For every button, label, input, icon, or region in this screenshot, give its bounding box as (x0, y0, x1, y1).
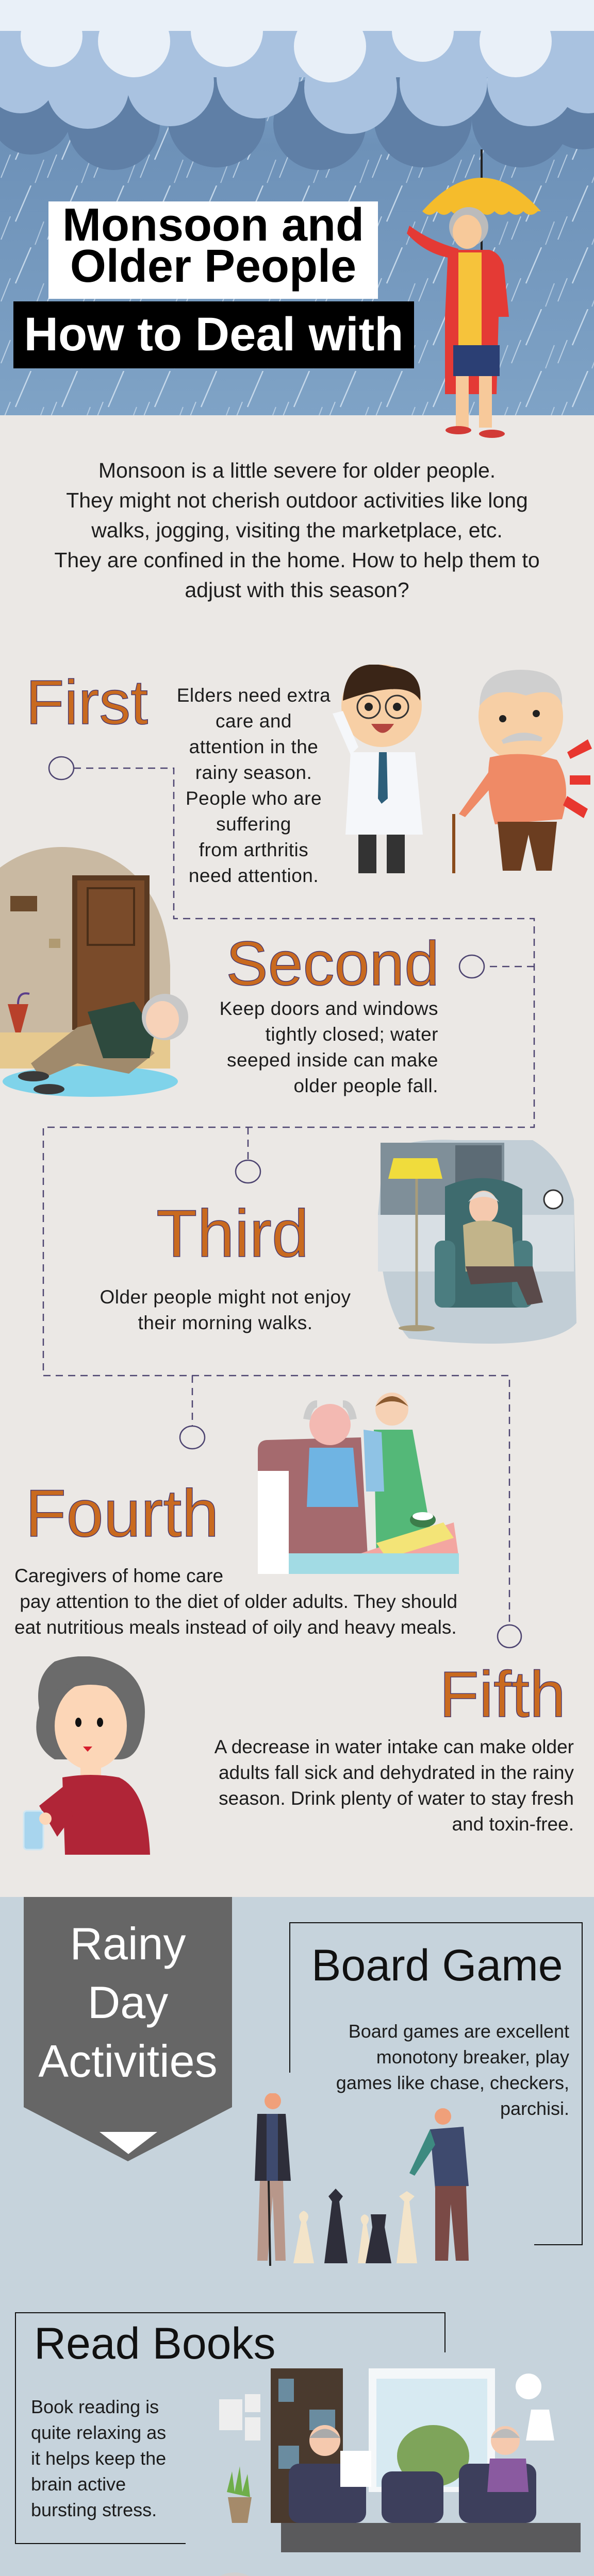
title box: Monsoon and Older People: Older People (70, 241, 356, 292)
text: second: tightly closed; water (266, 1024, 438, 1045)
illustration: woman in armchair by window (378, 1140, 576, 1344)
text: read books: brain active (31, 2473, 126, 2495)
panel: Board Game (289, 1922, 583, 2245)
heading: Fourth: Fourth (25, 1476, 219, 1551)
text: read books: bursting stress. (31, 2499, 157, 2520)
title banner: How to Deal with: How to Deal with (24, 308, 403, 361)
text: board game: parchisi. (500, 2098, 569, 2119)
illustration: woman with umbrella (407, 149, 541, 438)
panel: Read Books (15, 2312, 446, 2544)
text: read books (31, 2396, 166, 2520)
title box: Monsoon and Older People: Monsoon and (62, 199, 364, 251)
text: board game: games like chase, checkers, (336, 2072, 569, 2093)
text: first: suffering (216, 814, 291, 835)
text: third (100, 1286, 351, 1333)
illustration: woman with glass of water (23, 1656, 150, 1855)
text: first: Elders need extra (177, 685, 331, 706)
rainy day activities section background (0, 1897, 594, 2576)
text: second: Keep doors and windows (220, 998, 438, 1019)
text: first: from arthritis (199, 839, 308, 860)
text: first: care and (216, 710, 292, 732)
heading: Fifth: Fifth (439, 1658, 566, 1731)
text: read books: Book reading is (31, 2396, 159, 2417)
text: third: their morning walks. (138, 1312, 312, 1333)
illustration: doctor and elderly man (333, 665, 592, 873)
text: first: rainy season. (195, 762, 312, 783)
clouds (0, 67, 594, 170)
text: fifth: season. Drink plenty of water to stay fresh (219, 1788, 574, 1809)
text: first (177, 685, 331, 886)
text: fourth: pay attention to the diet of older adults. They should (20, 1591, 457, 1612)
illustration: living room reading (219, 2368, 581, 2552)
title box: Monsoon and Older People (48, 201, 378, 299)
heading: Board Game: Board Game (311, 1941, 563, 1990)
text: second: seeped inside can make (227, 1049, 438, 1071)
sky header (0, 0, 594, 415)
text: fourth (14, 1565, 457, 1638)
text: read books: quite relaxing as (31, 2422, 166, 2443)
text: first: People who are (186, 788, 322, 809)
banner: Rainy Day Activities (24, 1897, 232, 2161)
text: board game: Board games are excellent (349, 2021, 569, 2042)
heading: Second: Second (226, 928, 439, 998)
banner: Rainy Day Activities: Day (88, 1977, 168, 2028)
text: second: older people fall. (293, 1075, 438, 1096)
illustration: woman crafting (221, 2572, 249, 2576)
text: fifth: adults fall sick and dehydrated in the rainy (219, 1762, 574, 1783)
heading: First: First (26, 667, 148, 737)
text: read books: it helps keep the (31, 2448, 166, 2469)
text: fifth (214, 1736, 574, 1835)
intro text: They might not cherish outdoor activities like long (66, 488, 528, 512)
intro text: They are confined in the home. How to help them to (54, 548, 540, 572)
intro text (54, 459, 540, 602)
text: board game: monotony breaker, play (376, 2046, 569, 2067)
intro text: adjust with this season? (185, 578, 409, 602)
heading: Read Books: Read Books (34, 2319, 276, 2368)
text: fifth: and toxin-free. (452, 1814, 574, 1835)
text: fourth: Caregivers of home care (14, 1565, 223, 1586)
illustration: elderly men playing chess (255, 2093, 469, 2266)
illustration: caregiver feeding elderly man (258, 1393, 459, 1574)
intro text: walks, jogging, visiting the marketplace, etc. (91, 518, 503, 542)
text: third: Older people might not enjoy (100, 1286, 351, 1308)
text: fifth: A decrease in water intake can make older (214, 1736, 574, 1757)
dashed connector path (42, 756, 535, 1649)
heading: Third: Third (156, 1196, 309, 1271)
text: fourth: eat nutritious meals instead of oily and heavy meals. (14, 1617, 457, 1638)
banner: Rainy Day Activities: Rainy (70, 1918, 186, 1969)
text: first: need attention. (189, 865, 319, 886)
text: second (220, 998, 438, 1096)
illustration: fallen elderly man at door (0, 847, 188, 1097)
text: first: attention in the (189, 736, 318, 757)
text: board game (336, 2021, 569, 2119)
intro text: Monsoon is a little severe for older people. (98, 459, 496, 482)
banner: Rainy Day Activities: Activities (38, 2036, 218, 2087)
